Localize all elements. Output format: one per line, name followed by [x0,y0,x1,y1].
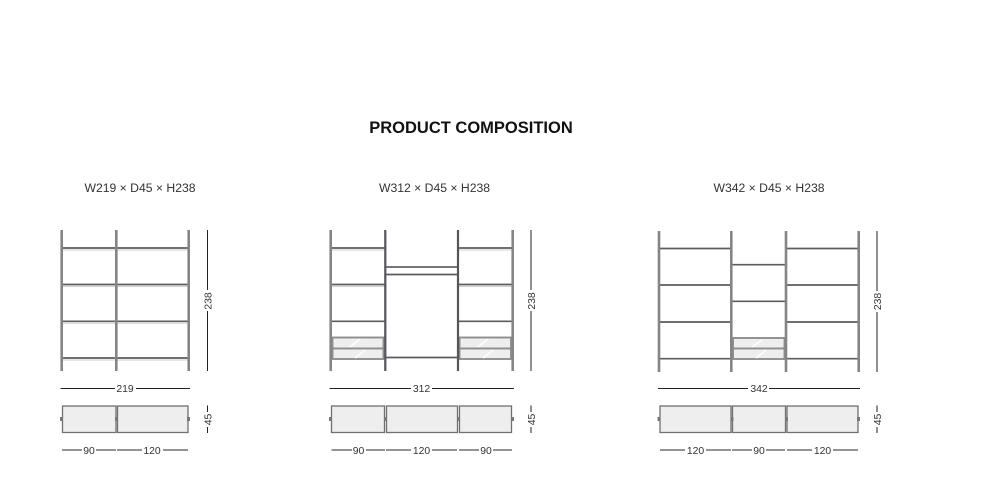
width dimension 219 [60,384,190,395]
width dimension 312: 312 [413,384,430,395]
module widths 120, 90, 120 [660,446,858,457]
heading: W219 dimensions: W219 × D45 × H238 [84,181,196,195]
module widths 90 and 120: 90 [83,446,95,457]
depth dimension 45 [527,406,538,433]
depth dimension 45 [873,406,884,433]
height dimension 238: 238 [204,292,214,310]
module widths 120, 90, 120: 90 [753,446,765,457]
plan view W342 [658,406,860,432]
panel: composition W312 [329,181,538,457]
module widths 120, 90, 120: 120 [814,446,831,457]
depth dimension 45: 45 [204,414,214,425]
front elevation W312 [331,230,513,371]
depth dimension 45 [204,406,214,433]
heading: W312 dimensions: W312 × D45 × H238 [379,181,490,195]
front elevation W342 [659,231,859,372]
panel: composition W342 [658,181,884,457]
plan view W312 [329,406,514,432]
depth dimension 45: 45 [873,414,884,425]
height dimension 238: 238 [873,293,884,310]
drawers left [332,338,384,359]
front elevation W219 [62,230,189,371]
drawers right [460,338,511,359]
height dimension 238: 238 [527,292,538,310]
module widths 90 and 120: 120 [143,446,161,457]
plan view W219 [60,406,190,432]
drawers centre [733,338,784,359]
depth dimension 45: 45 [527,414,538,425]
module widths 90, 120, 90: 120 [413,446,430,457]
module widths 90, 120, 90: 90 [480,446,492,457]
width dimension 342: 342 [750,384,768,395]
panel: composition W219 [60,181,214,457]
module widths 90 and 120 [62,446,188,457]
module widths 120, 90, 120: 120 [687,446,704,457]
module widths 90, 120, 90 [332,446,512,457]
heading: W342 dimensions: W342 × D45 × H238 [713,181,825,195]
title: PRODUCT COMPOSITION [369,119,573,137]
width dimension 219: 219 [116,384,134,395]
module widths 90, 120, 90: 90 [353,446,364,457]
